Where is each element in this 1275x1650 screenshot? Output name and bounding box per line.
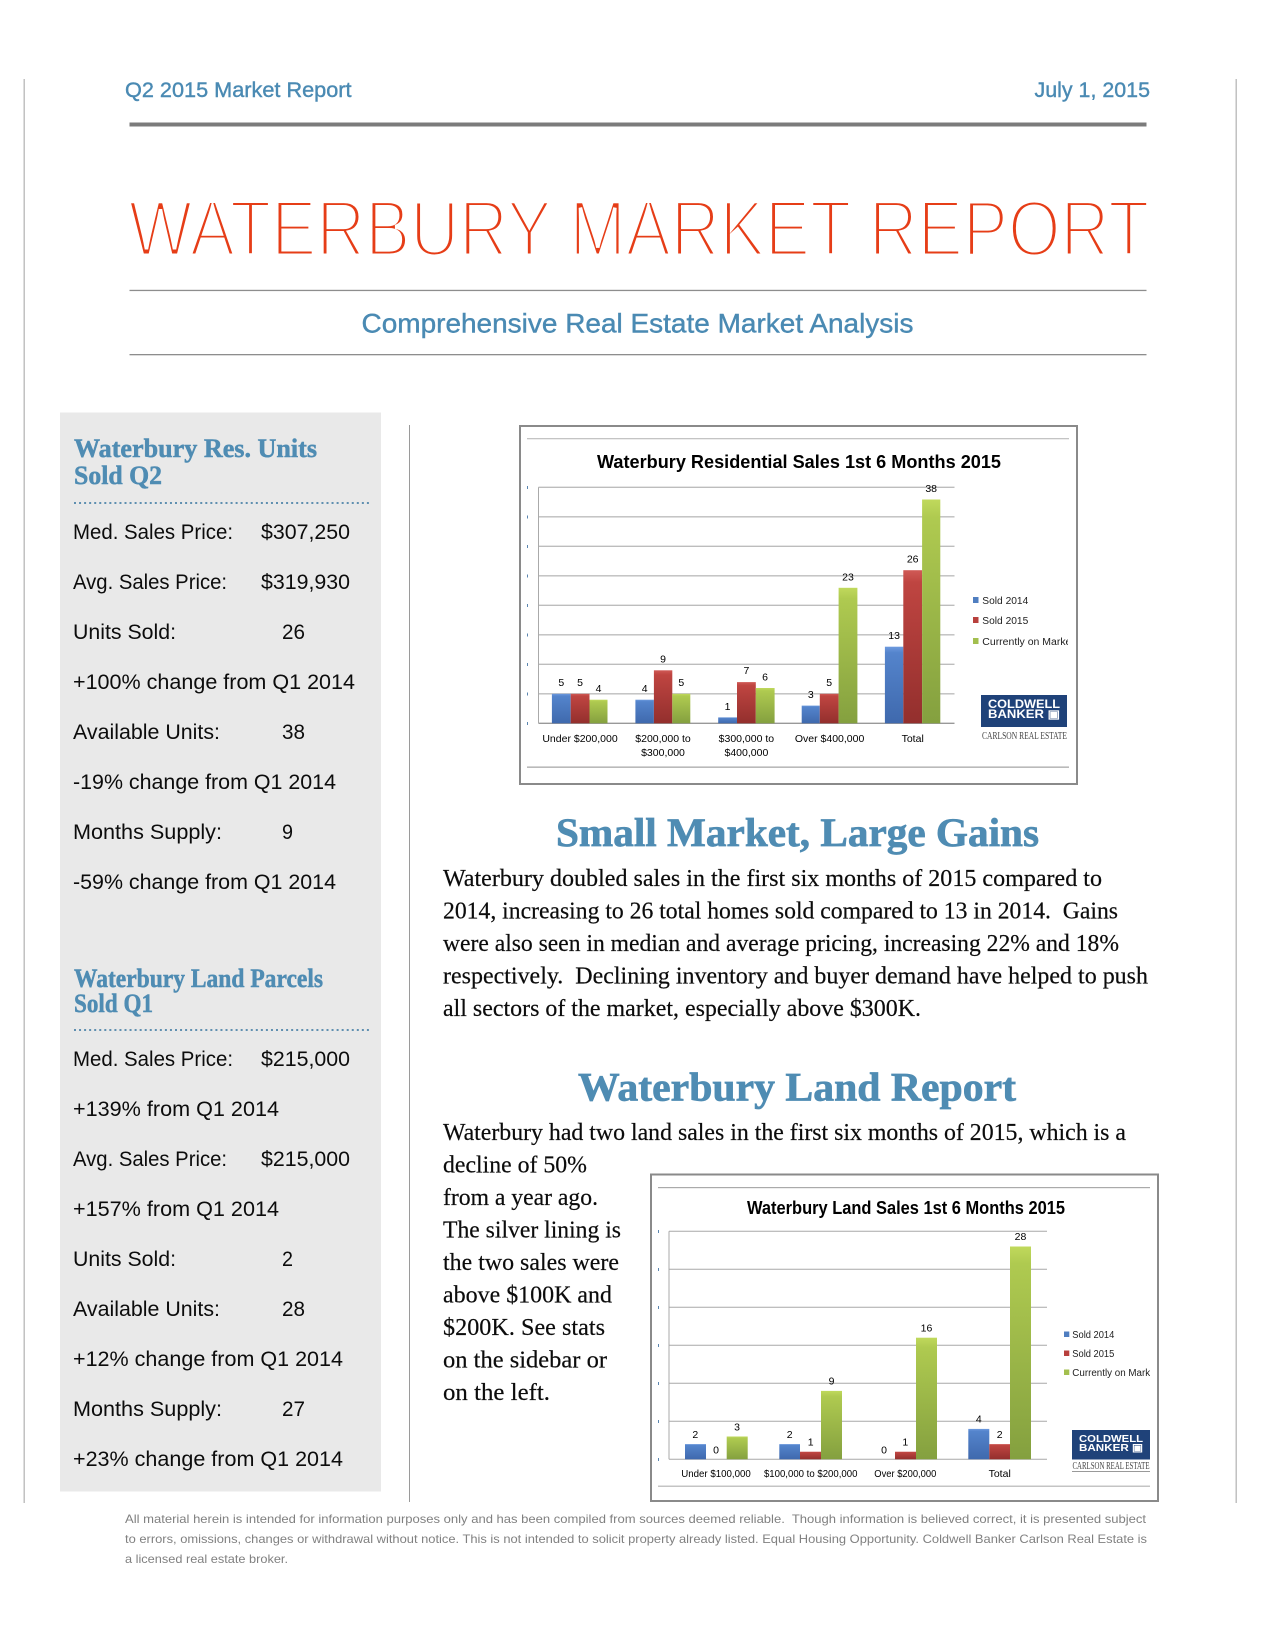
sidebar heading: land parcels: Waterbury Land Parcels	[74, 964, 323, 993]
data labels: land: 2	[692, 1429, 698, 1441]
body text: land report: above $100K and	[443, 1282, 612, 1308]
data labels: residential: 4	[596, 683, 602, 695]
bars: land	[685, 1246, 1031, 1459]
body text: land report: Waterbury had two land sales in the first six months of 2015, which is a	[443, 1119, 1126, 1146]
panel: sidebar stats	[60, 412, 381, 1492]
legend: land: Sold 2015	[1072, 1349, 1115, 1360]
data labels: residential: 7	[743, 665, 749, 677]
header: report label and date	[125, 78, 1150, 102]
data labels: land: 4	[976, 1414, 982, 1426]
legend: residential: Sold 2015	[982, 616, 1029, 627]
footer disclaimer: a licensed real estate broker.	[125, 1552, 288, 1566]
data labels: land: 16	[921, 1322, 932, 1334]
residential statistics: Med. Sales Price:	[73, 521, 233, 544]
category labels: residential: Under $200,000	[542, 733, 618, 745]
residential statistics: Units Sold:	[73, 621, 176, 644]
category labels: land: Over $200,000	[874, 1468, 936, 1480]
bars: residential	[552, 500, 940, 723]
chart: residential sales	[520, 426, 1077, 784]
body text: land report: decline of 50%	[443, 1152, 587, 1178]
data labels: land: 1	[902, 1436, 908, 1448]
data labels: land: 1	[808, 1436, 814, 1448]
land statistics: 28	[282, 1298, 305, 1321]
category labels: residential: $200,000 to	[635, 733, 691, 745]
body text: land report: from a year ago.	[443, 1184, 598, 1211]
subtitle: Comprehensive Real Estate Market Analysis	[362, 308, 914, 338]
data labels: residential: 1	[725, 701, 731, 713]
land statistics: +139% from Q1 2014	[73, 1098, 279, 1121]
data labels: residential: 23	[842, 572, 854, 584]
headline: land report: Waterbury Land Report	[578, 1064, 1017, 1110]
residential statistics: $307,250	[261, 521, 350, 544]
data labels: residential: 13	[888, 630, 900, 642]
body text: land report: $200K. See stats	[443, 1314, 605, 1341]
data labels: residential: 5	[826, 677, 832, 689]
category labels: residential: $400,000	[725, 747, 768, 759]
data labels: land: 3	[734, 1422, 740, 1434]
land statistics: $215,000	[261, 1048, 350, 1071]
body text: land report: The silver lining is	[443, 1216, 621, 1244]
data labels: residential: 9	[660, 654, 666, 666]
data labels: land: 2	[997, 1429, 1003, 1441]
land statistics: +157% from Q1 2014	[73, 1198, 279, 1221]
land statistics	[73, 1048, 350, 1471]
data labels: residential: 5	[577, 677, 583, 689]
legend: residential: Currently on Market	[982, 637, 1075, 648]
logo: Coldwell Banker: COLDWELL	[988, 699, 1060, 711]
body text: land report: the two sales were	[443, 1249, 619, 1276]
plot axes and gridlines	[527, 486, 954, 725]
data labels: land: 0	[713, 1444, 719, 1456]
footer disclaimer: All material herein is intended for information purposes only and has been compiled from sources deemed reliable. Though information is believed correct, it is presented subject	[125, 1512, 1147, 1526]
legend: land	[1064, 1330, 1150, 1378]
residential statistics: 9	[282, 821, 293, 844]
residential statistics: Avg. Sales Price:	[73, 571, 227, 594]
logo: Coldwell Banker: CARLSON REAL ESTATE	[982, 731, 1067, 742]
data labels: residential: 38	[925, 483, 937, 495]
legend: residential	[973, 596, 1075, 648]
data labels: residential: 5	[678, 677, 684, 689]
body text: sales analysis: were also seen in median and average pricing, increasing 22% and 18%	[443, 930, 1119, 957]
category labels: residential: $300,000 to	[719, 733, 774, 745]
footer disclaimer: to errors, omissions, changes or withdrawal without notice. This is not intended to solicit property already listed. Equal Housing Opportunity. Coldwell Banker Carlson Real Estate is	[125, 1532, 1147, 1546]
sidebar heading: residential units: Sold Q2	[74, 461, 162, 490]
land statistics: Avg. Sales Price:	[73, 1148, 227, 1171]
header: report label and date: Q2 2015 Market Report	[125, 78, 352, 102]
residential statistics: -19% change from Q1 2014	[73, 771, 336, 794]
residential statistics: Months Supply:	[73, 821, 222, 844]
footer disclaimer	[125, 1512, 1147, 1566]
logo: Coldwell Banker: BANKER ▣	[1079, 1442, 1143, 1454]
data labels: land: 28	[1015, 1231, 1026, 1243]
logo: Coldwell Banker: COLDWELL	[1079, 1433, 1144, 1445]
category labels: residential: Total	[902, 733, 924, 745]
sidebar heading: residential units: Waterbury Res. Units	[74, 434, 317, 463]
plot axes and gridlines	[658, 1230, 1047, 1461]
sidebar heading: land parcels	[74, 964, 369, 1030]
residential statistics: -59% change from Q1 2014	[73, 871, 336, 894]
data labels: residential: 4	[642, 683, 648, 695]
residential statistics: +100% change from Q1 2014	[73, 671, 355, 694]
legend: residential: Sold 2014	[982, 596, 1029, 607]
chart title: Waterbury Land Sales 1st 6 Months 2015	[747, 1198, 1065, 1218]
body text: sales analysis: 2014, increasing to 26 total homes sold compared to 13 in 2014. Gains	[443, 898, 1118, 924]
land statistics: Units Sold:	[73, 1248, 176, 1271]
land statistics: Available Units:	[73, 1298, 220, 1321]
data labels: land: 9	[829, 1376, 835, 1388]
category labels: residential	[542, 733, 924, 759]
data labels: land: 2	[787, 1429, 793, 1441]
category labels: land: Under $100,000	[681, 1468, 751, 1480]
category labels: land: $100,000 to $200,000	[764, 1468, 858, 1480]
legend: land: Sold 2014	[1072, 1330, 1115, 1341]
category labels: residential: $300,000	[641, 747, 685, 759]
land statistics: 27	[282, 1398, 305, 1421]
logo: Coldwell Banker	[981, 695, 1067, 742]
data labels: residential: 26	[907, 554, 919, 566]
land statistics: Months Supply:	[73, 1398, 222, 1421]
residential statistics: Available Units:	[73, 721, 220, 744]
headline: small market: Small Market, Large Gains	[556, 810, 1039, 855]
body text: sales analysis	[443, 865, 1148, 1022]
body text: land report	[443, 1119, 1126, 1406]
legend: land: Currently on Market	[1072, 1368, 1159, 1379]
residential statistics: $319,930	[261, 571, 350, 594]
sidebar heading: land parcels: Sold Q1	[74, 989, 153, 1018]
chart: land sales	[651, 1174, 1159, 1501]
category labels: land: Total	[989, 1468, 1011, 1480]
residential statistics	[73, 521, 355, 894]
data labels: land: 0	[881, 1444, 887, 1456]
category labels: residential: Over $400,000	[795, 733, 864, 745]
body text: sales analysis: Waterbury doubled sales in the first six months of 2015 compared to	[443, 865, 1102, 892]
data labels: residential: 5	[558, 677, 564, 689]
category labels: land	[681, 1468, 1011, 1480]
logo: Coldwell Banker: BANKER ▣	[988, 709, 1060, 721]
data labels: residential: 3	[808, 689, 814, 701]
logo: Coldwell Banker: CARLSON REAL ESTATE	[1072, 1461, 1150, 1472]
data labels: land	[692, 1231, 1026, 1456]
land statistics: +23% change from Q1 2014	[73, 1448, 343, 1471]
header: report label and date: July 1, 2015	[1034, 78, 1150, 102]
body text: sales analysis: respectively. Declining inventory and buyer demand have helped to push	[443, 962, 1148, 990]
logo: Coldwell Banker	[1072, 1430, 1150, 1472]
residential statistics: 26	[282, 621, 305, 644]
body text: sales analysis: all sectors of the market, especially above $300K.	[443, 995, 921, 1022]
land statistics: Med. Sales Price:	[73, 1048, 233, 1071]
body text: land report: on the left.	[443, 1379, 550, 1406]
data labels: residential: 6	[762, 672, 768, 684]
residential statistics: 38	[282, 721, 305, 744]
sidebar heading: residential units	[74, 434, 369, 503]
land statistics: $215,000	[261, 1148, 350, 1171]
land statistics: 2	[282, 1248, 293, 1271]
body text: land report: on the sidebar or	[443, 1346, 607, 1374]
chart title: Waterbury Residential Sales 1st 6 Months 2015	[597, 451, 1001, 472]
data labels: residential	[558, 483, 937, 713]
land statistics: +12% change from Q1 2014	[73, 1348, 343, 1371]
